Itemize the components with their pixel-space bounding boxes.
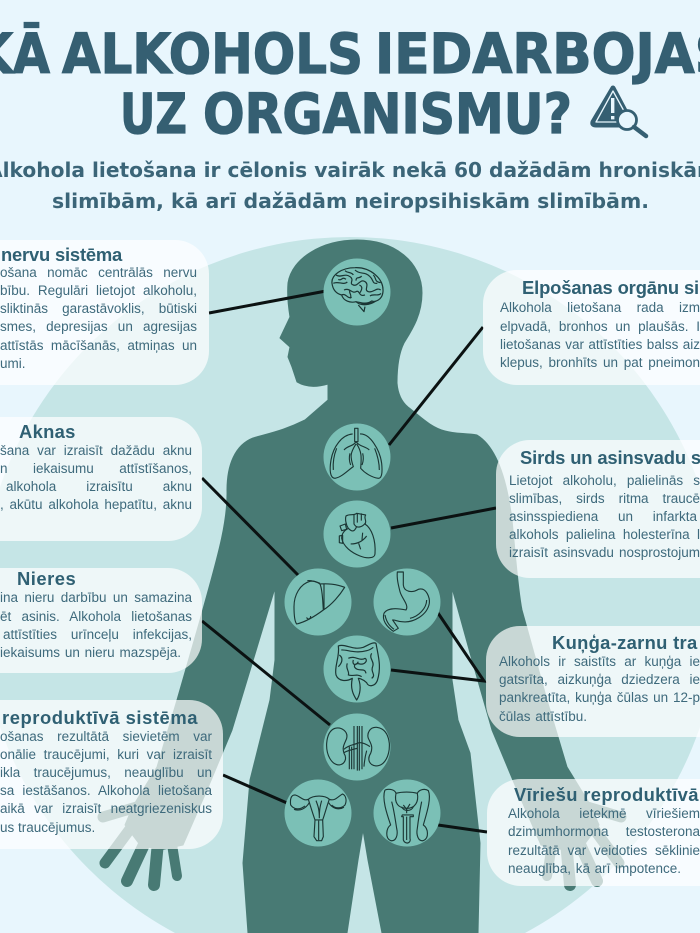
background circle bbox=[0, 237, 700, 933]
heading: male reproductive system: Vīriešu reproduktīvā bbox=[514, 784, 699, 805]
connector: lungs bbox=[389, 327, 483, 445]
icon: female reproductive bbox=[284, 780, 352, 846]
title: ALKOHOLS bbox=[62, 22, 363, 86]
panel: male reproductive system bbox=[487, 779, 700, 886]
connector: brain bbox=[209, 291, 326, 313]
heading: respiratory organs: Elpošanas orgānu si bbox=[522, 277, 699, 298]
heading: gastrointestinal tract: Kuņģa-zarnu tra bbox=[552, 632, 698, 653]
text: liver: , akūtu alkohola hepatītu, aknu bbox=[0, 497, 192, 512]
text: nervous system: attīstās mācīšanās, atmiņas un bbox=[0, 338, 197, 353]
text: heart and blood vessels: Lietojot alkoholu, palielinās s bbox=[509, 473, 700, 488]
text: nervous system: ošana nomāc centrālās nervu bbox=[0, 265, 197, 280]
icon: male reproductive bbox=[374, 780, 440, 846]
icon: kidneys bbox=[324, 714, 390, 780]
text: kidneys: attīstīties urīnceļu infekcijas, bbox=[3, 627, 192, 642]
text: kidneys: ina nieru darbību un samazina bbox=[0, 590, 192, 605]
text: female reproductive system: us traucējumus. bbox=[0, 820, 95, 835]
text: kidneys: ēt asinis. Alkohola lietošanas bbox=[0, 609, 192, 624]
text: male reproductive system: dzimumhormona testosterona bbox=[508, 824, 700, 839]
text: female reproductive system: ošanas rezultātā sievietēm var bbox=[0, 729, 212, 744]
connector: liver bbox=[202, 478, 298, 575]
panel: nervous system bbox=[0, 240, 209, 385]
title bbox=[0, 22, 700, 146]
text: kidneys bbox=[0, 590, 192, 660]
connector: kidneys bbox=[202, 621, 330, 725]
panel: gastrointestinal tract bbox=[486, 626, 700, 737]
connector: stomach bbox=[391, 613, 484, 681]
icon: intestines bbox=[324, 636, 390, 702]
text: gastrointestinal tract bbox=[499, 654, 700, 724]
subtitle bbox=[0, 158, 700, 213]
panel: liver bbox=[0, 417, 202, 541]
text: liver: n iekaisumu attīstīšanos, bbox=[0, 461, 192, 476]
text: respiratory organs: lietošanas var attīstīties balss aiz bbox=[500, 337, 700, 352]
icon: lungs bbox=[324, 424, 390, 490]
heading: female reproductive system: reproduktīvā sistēma bbox=[2, 707, 198, 728]
connector: male reproductive bbox=[438, 825, 487, 832]
panel: heart and blood vessels bbox=[496, 440, 700, 578]
text: female reproductive system: sa iestāšanos. Alkohola lietošana bbox=[0, 783, 212, 798]
text: male reproductive system: Alkohola ietekmē vīriešiem bbox=[508, 806, 700, 821]
text: nervous system bbox=[0, 265, 197, 371]
text: nervous system: smes, depresijas un agresijas bbox=[0, 319, 197, 334]
text: respiratory organs: elpvadā, bronhos un plaušās. I bbox=[500, 319, 700, 334]
icon: brain bbox=[324, 258, 390, 326]
text: female reproductive system: onālie traucējumi, kuri var izraisīt bbox=[0, 747, 212, 762]
text: gastrointestinal tract: Alkohols ir saistīts ar kuņģa ie bbox=[499, 654, 700, 669]
text: heart and blood vessels: asinsspiediena un infarkta bbox=[509, 509, 697, 524]
title: ORGANISMU? bbox=[203, 82, 572, 146]
icon: heart bbox=[324, 500, 390, 568]
text: kidneys: iekaisums un nieru mazspēja. bbox=[0, 645, 181, 660]
subtitle: slimībām, kā arī dažādām neiropsihiskām slimībām. bbox=[52, 189, 649, 213]
text: heart and blood vessels: slimības, sirds ritma traucē bbox=[509, 491, 700, 506]
text: nervous system: umi. bbox=[0, 356, 26, 371]
icon: liver bbox=[284, 568, 352, 636]
human body silhouette bbox=[103, 240, 621, 933]
text: respiratory organs bbox=[500, 300, 700, 370]
text: gastrointestinal tract: pankreatīta, kuņģa čūlas un 12-p bbox=[499, 690, 700, 705]
text: gastrointestinal tract: gatsrīta, aizkuņģa dziedzera ie bbox=[499, 672, 700, 687]
text: heart and blood vessels: alkohols palielina holesterīna l bbox=[509, 527, 700, 542]
connector: female reproductive bbox=[223, 775, 287, 803]
icon: warning triangle with magnifier bbox=[593, 88, 646, 136]
text: gastrointestinal tract: čūlas attīstību. bbox=[499, 709, 587, 724]
text: male reproductive system: rezultātā var veidoties sēklinie bbox=[508, 843, 700, 858]
text: liver: šana var izraisīt dažādu aknu bbox=[0, 443, 192, 458]
heading: liver: Aknas bbox=[19, 421, 76, 442]
text: male reproductive system: neauglība, kā arī impotence. bbox=[508, 861, 681, 876]
panel: respiratory organs bbox=[483, 270, 700, 385]
panel: female reproductive system bbox=[0, 700, 223, 849]
text: female reproductive system: ikla traucējumus, neauglību un bbox=[0, 765, 212, 780]
text: nervous system: sliktinās garastāvoklis, būtiski bbox=[0, 301, 197, 316]
heading: kidneys: Nieres bbox=[17, 568, 76, 589]
text: female reproductive system bbox=[0, 729, 212, 835]
text: nervous system: bību. Regulāri lietojot alkoholu, bbox=[0, 283, 197, 298]
text: female reproductive system: aikā var izraisīt neatgriezeniskus bbox=[0, 801, 212, 816]
title: UZ bbox=[120, 82, 187, 146]
text: liver: alkohola izraisītu aknu bbox=[6, 479, 192, 494]
text: heart and blood vessels bbox=[509, 473, 700, 560]
text: male reproductive system bbox=[508, 806, 700, 876]
heading: heart and blood vessels: Sirds un asinsvadu s bbox=[520, 447, 700, 468]
icon: stomach bbox=[374, 568, 440, 636]
connector: heart bbox=[391, 508, 496, 528]
text: respiratory organs: klepus, bronhīts un pat pneimon bbox=[500, 355, 700, 370]
text: heart and blood vessels: izraisīt asinsvadu nosprostojum bbox=[509, 545, 700, 560]
text: liver bbox=[0, 443, 192, 512]
text: respiratory organs: Alkohola lietošana rada izm bbox=[500, 300, 700, 315]
panel: kidneys bbox=[0, 568, 202, 673]
heading: nervous system: nervu sistēma bbox=[1, 244, 122, 265]
